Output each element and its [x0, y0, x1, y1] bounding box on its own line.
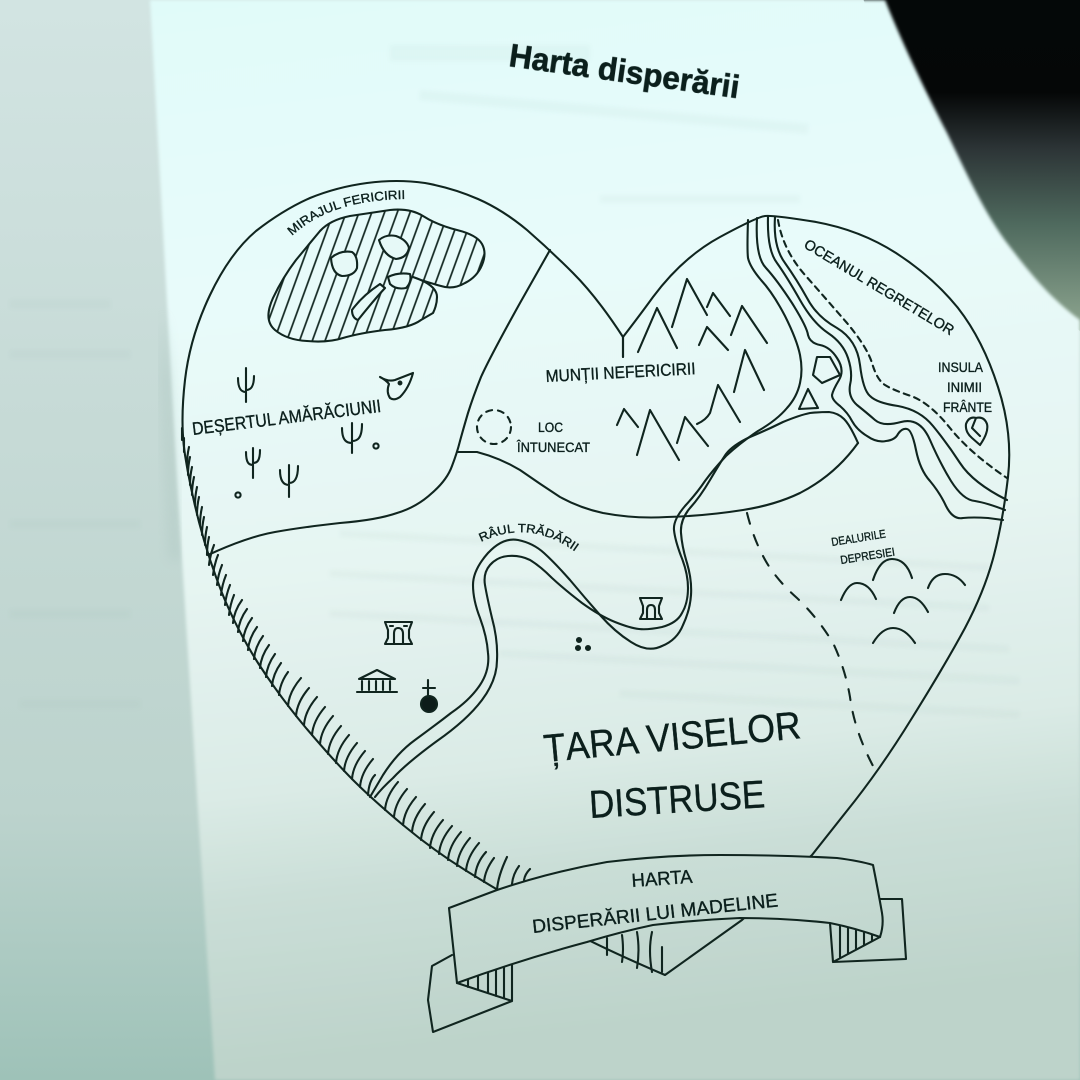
- coast lines of the Ocean of Regrets: [757, 217, 1007, 520]
- heart outline: [182, 181, 1009, 975]
- spine shadow: [160, 310, 180, 560]
- label: ribbon title: DISPERĂRII LUI MADELINE: [531, 890, 779, 938]
- label: Dealurile Depresiei: DEALURILE: [831, 528, 887, 549]
- icon: castle left: [385, 622, 412, 644]
- river: Râul Trădării: [370, 220, 858, 797]
- label: Oceanul Regretelor: OCEANUL REGRETELOR: [801, 237, 957, 339]
- lake and triangle islets: [799, 357, 840, 409]
- broken heart island icon: [966, 418, 987, 445]
- skull icon: [380, 373, 413, 399]
- island: Mirajul Fericirii: [268, 210, 484, 342]
- dark place circle: [477, 410, 511, 444]
- map labels: [191, 190, 992, 938]
- label: Dealurile Depresiei: [831, 528, 896, 567]
- ribbon body: [449, 855, 883, 983]
- title: Harta disperării: [507, 37, 742, 105]
- label: Loc întunecat: LOC: [538, 419, 563, 435]
- label: Dealurile Depresiei: DEPRESIEI: [840, 547, 896, 567]
- label: ribbon title: HARTA: [631, 867, 694, 892]
- label: Mirajul Fericirii: MIRAJUL FERICIRII: [286, 190, 404, 236]
- icon: grave with cross: [421, 680, 437, 712]
- label: Insula Inimii Frânte: INIMII: [947, 380, 982, 395]
- label: Țara Viselor Distruse: ȚARA VISELOR: [542, 704, 803, 771]
- label: Râul Trădării: RÂUL TRĂDĂRII: [478, 524, 580, 552]
- dashed border path: [747, 513, 878, 775]
- ribbon centre hatch: [607, 932, 662, 972]
- left edge hatching: [182, 428, 530, 890]
- icon: castle right: [640, 598, 662, 619]
- label: Munții Nefericirii: MUNȚII NEFERICIRII: [545, 359, 696, 386]
- label: Insula Inimii Frânte: FRÂNTE: [943, 400, 992, 415]
- mountains: [617, 279, 767, 460]
- ribbon right tail: [830, 899, 906, 962]
- ribbon banner: [428, 855, 906, 1032]
- desert region border: [208, 250, 550, 555]
- icon: temple: [357, 670, 397, 692]
- label: Insula Inimii Frânte: INSULA: [938, 360, 983, 375]
- label: Țara Viselor Distruse: DISTRUSE: [588, 773, 766, 827]
- ribbon left tail: [428, 955, 512, 1032]
- hills: [841, 559, 965, 643]
- label: ribbon title: [531, 867, 779, 938]
- mountain region border: [458, 443, 858, 518]
- label: Țara Viselor Distruse: [542, 704, 803, 827]
- label: Loc întunecat: ÎNTUNECAT: [516, 439, 590, 455]
- label: Deșertul Amărăciunii: DEȘERTUL AMĂRĂCIUNII: [191, 396, 382, 439]
- heart map illustration: [182, 181, 1009, 1032]
- cacti: [235, 368, 379, 498]
- dark background corner: [860, 0, 1080, 340]
- icon: dark dots: [576, 638, 590, 650]
